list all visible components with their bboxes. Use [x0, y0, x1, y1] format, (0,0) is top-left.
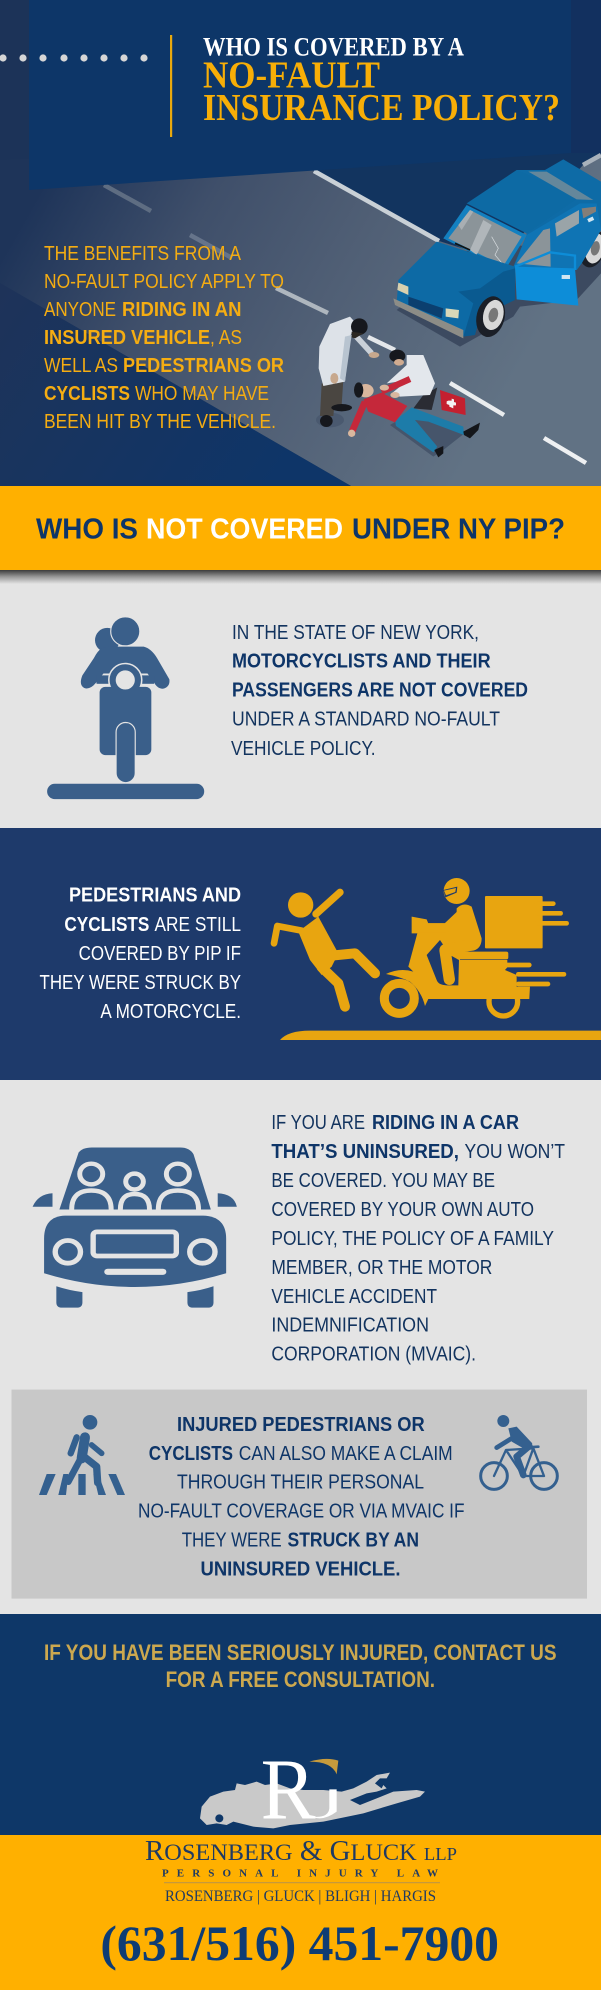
text: motorcyclists not covered: PASSENGERS ARE NOT COVERED [232, 680, 528, 702]
banner: who is not covered [0, 486, 601, 584]
rear wheel [576, 227, 601, 270]
text: still covered: CYCLISTS [64, 914, 149, 936]
call to action text [44, 1640, 556, 1692]
text: riding in an uninsured car: THAT’S UNINSURED, [271, 1141, 459, 1163]
road surface [0, 140, 601, 486]
text: claim through personal coverage: UNINSURED VEHICLE. [200, 1558, 400, 1580]
text: riding in an uninsured car: RIDING IN A CAR [372, 1112, 519, 1134]
illustration: medics and injured person [316, 317, 480, 457]
callout: injured pedestrians or cyclists [12, 1390, 587, 1599]
firm tagline: PERSONAL INJURY LAW [162, 1868, 438, 1880]
title: NO-FAULT [203, 55, 380, 97]
text: riding in an uninsured car: COVERED BY YOUR OWN AUTO [271, 1199, 534, 1221]
text: claim through personal coverage [138, 1414, 464, 1580]
hero paragraph: PEDESTRIANS OR [123, 355, 284, 377]
banner heading: UNDER NY PIP? [352, 514, 565, 546]
panel: uninsured car [0, 1080, 601, 1614]
panel: pedestrians and cyclists [0, 828, 601, 1080]
front wheel [472, 293, 509, 340]
text: claim through personal coverage: THROUGH THEIR PERSONAL [177, 1472, 424, 1494]
banner heading: WHO IS [36, 514, 138, 546]
phone number: (631/516) 451-7900 [100, 1915, 499, 1971]
title [203, 33, 560, 129]
title panel [29, 0, 571, 190]
hero paragraph: ANYONE [44, 299, 116, 321]
text: riding in an uninsured car [271, 1112, 565, 1366]
text: still covered: A MOTORCYCLE. [100, 1001, 241, 1023]
text: riding in an uninsured car: BE COVERED. YOU MAY BE [271, 1170, 495, 1192]
navy wedge behind car [314, 100, 601, 260]
hero paragraph: WHO MAY HAVE [135, 383, 269, 405]
header backdrop [571, 0, 601, 153]
illustration: blue car [393, 159, 601, 347]
icon: cyclist [481, 1415, 557, 1489]
firm name: ROSENBERG & GLUCK LLP [145, 1836, 457, 1867]
hero paragraph: BEEN HIT BY THE VEHICLE. [44, 411, 276, 433]
text: riding in an uninsured car: CORPORATION (MVAIC). [271, 1344, 476, 1366]
text: claim through personal coverage: INJURED PEDESTRIANS OR [177, 1414, 425, 1436]
text: claim through personal coverage: THEY WERE [182, 1530, 282, 1552]
hero paragraph: RIDING IN AN [122, 299, 242, 321]
panel: call to action footer [0, 1614, 601, 1837]
text: riding in an uninsured car: IF YOU ARE [271, 1112, 365, 1134]
logo: Long Island map with monogram [200, 1740, 425, 1837]
text: claim through personal coverage: CYCLISTS [149, 1443, 233, 1465]
hero paragraph: CYCLISTS [44, 383, 130, 405]
text: motorcyclists not covered: MOTORCYCLISTS AND THEIR [232, 650, 491, 672]
icon: family in a car [33, 1147, 237, 1308]
call to action text: FOR A FREE CONSULTATION. [166, 1667, 435, 1692]
panel: hero [0, 0, 601, 486]
icon: person struck by scooter [274, 878, 601, 1040]
banner heading: NOT COVERED [146, 514, 343, 546]
text: claim through personal coverage: CAN ALSO MAKE A CLAIM [239, 1443, 453, 1465]
hero paragraph: THE BENEFITS FROM A [44, 243, 242, 265]
text: still covered: THEY WERE STRUCK BY [40, 972, 241, 994]
banner heading [36, 514, 565, 546]
navy wedge left [0, 283, 351, 486]
icon: pedestrian on crosswalk [39, 1415, 125, 1495]
panel: motorcyclists [0, 584, 601, 828]
text: motorcyclists not covered: IN THE STATE OF NEW YORK, [232, 622, 479, 644]
scooter [384, 896, 567, 1016]
text: riding in an uninsured car: MEMBER, OR THE MOTOR [271, 1257, 492, 1279]
hero paragraph: NO-FAULT POLICY APPLY TO [44, 271, 284, 293]
text: motorcyclists not covered: UNDER A STANDARD NO-FAULT [232, 709, 500, 731]
title divider [170, 35, 172, 137]
text: riding in an uninsured car: YOU WON’T [464, 1141, 565, 1163]
hero paragraph: INSURED VEHICLE [44, 327, 210, 349]
icon: motorcycle with passenger [47, 617, 204, 799]
logo: Long Island map with monogram: R [261, 1740, 316, 1837]
first aid kit [440, 390, 466, 415]
text: still covered: PEDESTRIANS AND [69, 885, 241, 907]
hero paragraph: WELL AS [44, 355, 118, 377]
falling person [274, 892, 375, 1007]
road markings [104, 155, 601, 463]
text: riding in an uninsured car: INDEMNIFICATION [271, 1315, 429, 1337]
text: riding in an uninsured car: VEHICLE ACCIDENT [271, 1286, 437, 1308]
text: still covered [40, 885, 241, 1023]
hero paragraph: , AS [210, 327, 242, 349]
text: motorcyclists not covered [231, 622, 528, 760]
hero paragraph [44, 243, 284, 433]
text: still covered: COVERED BY PIP IF [79, 943, 241, 965]
title: INSURANCE POLICY? [203, 87, 560, 129]
text: claim through personal coverage: NO-FAULT COVERAGE OR VIA MVAIC IF [138, 1501, 464, 1523]
text: motorcyclists not covered: VEHICLE POLICY. [231, 738, 376, 760]
panel: firm contact [0, 1835, 601, 1990]
dotted rule [0, 54, 148, 62]
text: claim through personal coverage: STRUCK BY AN [288, 1530, 419, 1552]
partner names: ROSENBERG | GLUCK | BLIGH | HARGIS [165, 1888, 436, 1905]
text: riding in an uninsured car: POLICY, THE POLICY OF A FAMILY [271, 1228, 554, 1250]
rider [418, 878, 482, 979]
title: WHO IS COVERED BY A [203, 33, 464, 62]
text: still covered: ARE STILL [154, 914, 241, 936]
